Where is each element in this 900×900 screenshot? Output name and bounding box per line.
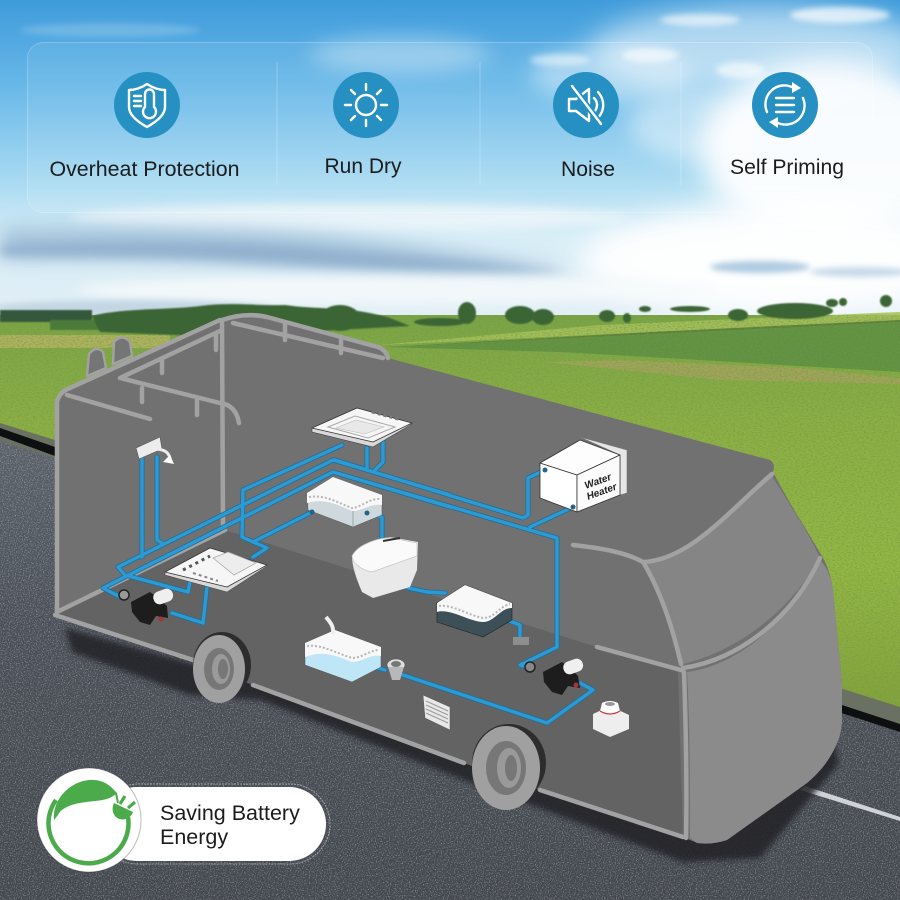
- icon: water heater: [540, 437, 627, 512]
- icon: rear water pump: [119, 587, 175, 625]
- badge text: [160, 801, 300, 849]
- badge pill: [100, 787, 326, 861]
- RV cutaway body: [55, 315, 842, 844]
- icon: front water pump: [525, 657, 585, 695]
- ladder tabs: [87, 349, 106, 376]
- RV shadow on the road: [65, 628, 838, 862]
- label: self priming: Self Priming: [730, 156, 844, 179]
- icon: fresh water tank: [305, 617, 381, 682]
- body frame lines: [573, 474, 820, 838]
- icon: toilet: [352, 537, 418, 598]
- icon: self priming: [752, 72, 818, 138]
- icon: noise: [553, 72, 619, 138]
- lower cab panel: [687, 560, 842, 844]
- front wheel: [472, 724, 546, 810]
- icon: green leaf plug: [49, 780, 135, 863]
- icon: wall vent: [423, 695, 450, 730]
- grass field: [0, 312, 900, 735]
- label: noise: Noise: [561, 158, 615, 181]
- blue water pipes: [103, 440, 593, 723]
- rear wheel: [193, 632, 251, 703]
- icon: water heater: Water: [583, 472, 614, 492]
- icon: grey water cabinet: [307, 477, 382, 527]
- darker floor: [55, 530, 683, 837]
- label: run dry: Run Dry: [324, 155, 402, 178]
- icon: black water tank: [437, 585, 529, 645]
- tree line on horizon: [0, 295, 892, 336]
- icon: pressure switch box: [593, 701, 629, 737]
- icon: overheat protection: [114, 72, 180, 138]
- badge circle: [37, 768, 141, 872]
- road: [0, 423, 900, 900]
- energy badge: [37, 768, 330, 872]
- sky background: [0, 0, 900, 330]
- icon: water heater: Heater: [585, 481, 619, 503]
- label: overheat protection: Overheat Protection: [50, 158, 239, 181]
- badge text: Saving Battery: [160, 801, 300, 825]
- icon: upper sink: [312, 408, 412, 447]
- icon: shower fixture: [136, 437, 174, 464]
- badge text: Energy: [160, 825, 228, 849]
- icon: lower sink: [165, 548, 267, 592]
- body silhouette: [55, 315, 842, 844]
- icon: strainer filter: [387, 659, 405, 680]
- windshield panel: [643, 476, 820, 664]
- icon: run dry: [333, 72, 399, 138]
- feature panel: [28, 42, 872, 212]
